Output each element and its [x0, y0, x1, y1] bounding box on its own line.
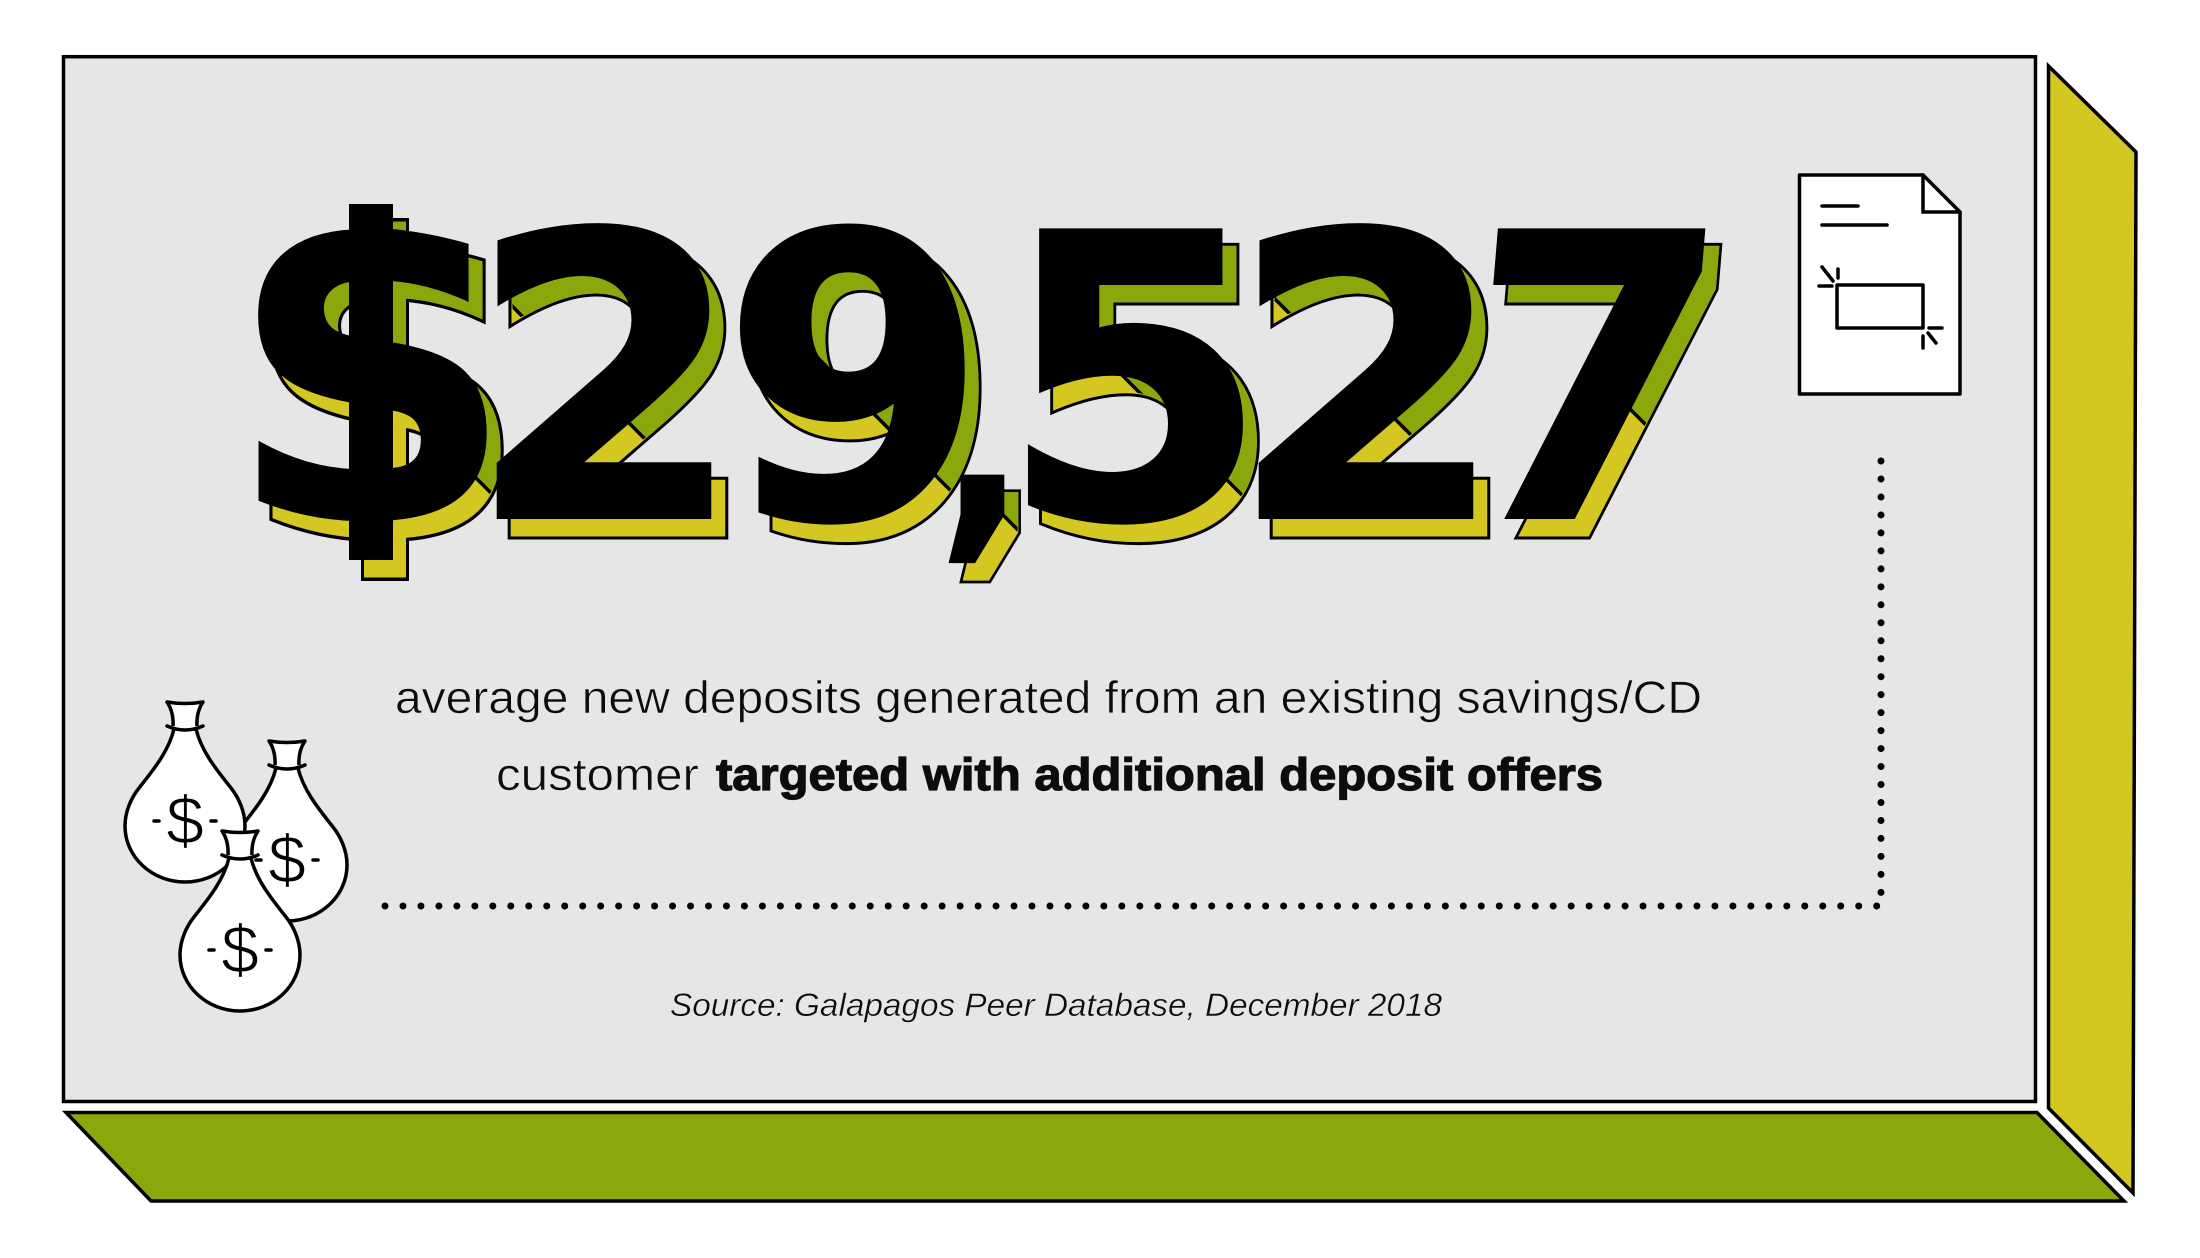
- black number face: ,: [937, 283, 1028, 588]
- dotted connector line: [385, 461, 1881, 906]
- icon: front money bag: $: [221, 912, 259, 988]
- shadow outline of number: ,: [951, 301, 1042, 605]
- shadow outline of number: $: [241, 123, 528, 644]
- shadow outline of number: 2: [480, 169, 759, 630]
- shadow outline of number: 5: [1013, 169, 1283, 629]
- shadow green upper fill: 5: [1013, 169, 1283, 629]
- icon: left money bag: [125, 702, 245, 882]
- shadow green upper fill: 9: [735, 169, 1002, 630]
- description text: average new deposits generated from an existing savings/CD: [395, 672, 1702, 723]
- source note: Source: Galapagos Peer Database, December 2018: [670, 987, 1442, 1023]
- black number face: [258, 204, 1706, 564]
- black number face: 5: [999, 151, 1269, 612]
- description text: targeted with additional deposit offers: [716, 749, 1603, 800]
- black number face: 9: [721, 152, 988, 612]
- black number face: 2: [1228, 151, 1507, 612]
- shadow yellow fill: 9: [735, 169, 1002, 630]
- colour split strokes: [475, 297, 1646, 532]
- shadow green upper fill: [324, 222, 1720, 530]
- shadow yellow fill: [272, 246, 1720, 581]
- description text: [395, 672, 1702, 800]
- shadow yellow fill: 2: [480, 169, 759, 630]
- shadow green upper fill: ,: [951, 301, 1042, 605]
- shadow green upper fill: 7: [1456, 169, 1754, 630]
- icon: back money bag: $: [268, 822, 306, 898]
- icon: front money bag: [180, 831, 300, 1011]
- shadow outline of number: [269, 218, 1722, 584]
- big number: $29,527 with offset shadow: [258, 204, 1722, 584]
- shadow yellow fill: ,: [951, 301, 1042, 605]
- black number face: 7: [1442, 152, 1740, 612]
- description text: customer: [496, 749, 699, 800]
- shadow green upper fill: $: [241, 123, 528, 644]
- shadow outline of number: 2: [1242, 169, 1521, 630]
- shadow outline of number: 7: [1456, 169, 1754, 630]
- icon: left money bag: $: [166, 783, 204, 859]
- shadow green upper fill: 2: [480, 169, 759, 630]
- shadow yellow fill: $: [241, 123, 528, 644]
- black number face: 2: [466, 151, 745, 612]
- shadow outline of number: 9: [735, 169, 1002, 630]
- shadow yellow fill: 7: [1456, 169, 1754, 630]
- panel: main grey card: [64, 57, 2036, 1102]
- panel: yellow right side face: [2048, 66, 2136, 1193]
- shadow green upper fill: 2: [1242, 169, 1521, 630]
- shadow yellow fill: 2: [1242, 169, 1521, 630]
- icon: back money bag: [227, 741, 347, 921]
- icon: money bags: [125, 702, 347, 1011]
- icon: document with selection box: [1800, 175, 1960, 394]
- panel: green bottom face: [66, 1112, 2124, 1201]
- black number face: $: [227, 106, 514, 626]
- shadow yellow fill: 5: [1013, 169, 1283, 629]
